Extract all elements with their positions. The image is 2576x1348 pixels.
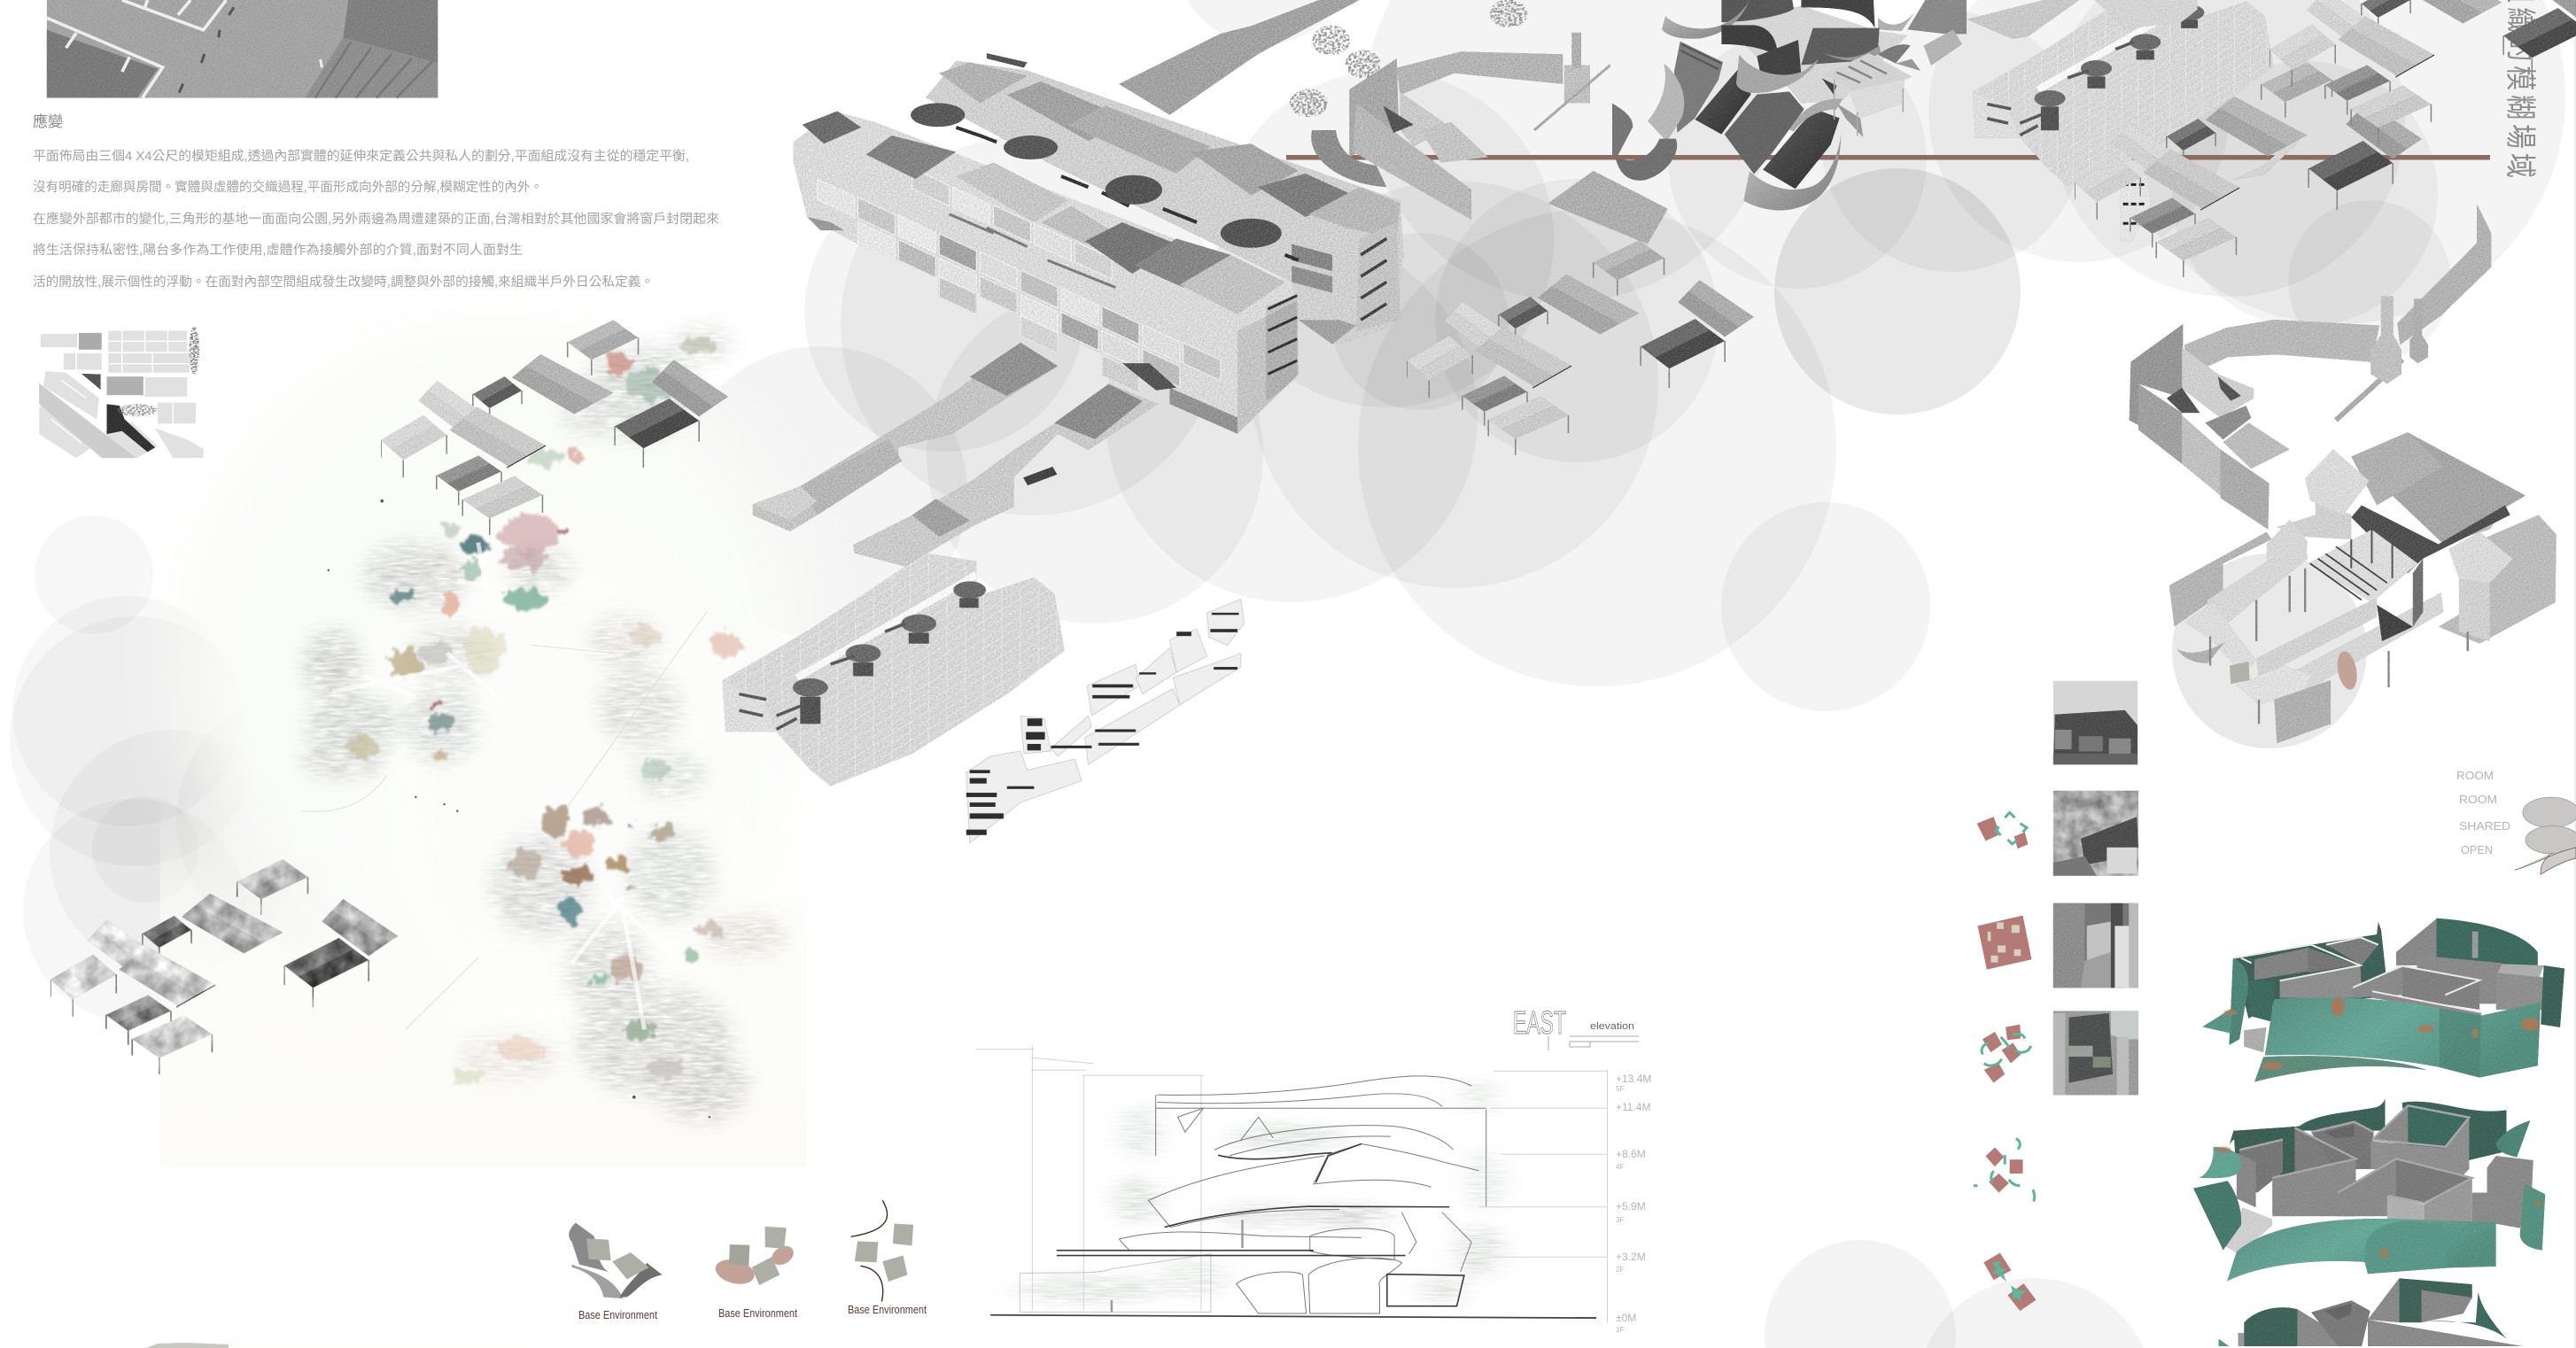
rear housing bar bbox=[911, 53, 1403, 345]
base environment labels bbox=[578, 1304, 927, 1321]
room labels: SHARED bbox=[2459, 820, 2510, 833]
translucent overlapping circles: upper field bbox=[675, 0, 2565, 1348]
diagram: arrows and squares bbox=[1983, 1253, 2036, 1311]
photo: old building bbox=[2053, 681, 2138, 764]
section strip bbox=[966, 599, 1245, 843]
body text: 平面佈局由三個4 X4公尺的模矩組成,透過內部實體的延伸來定義公共與私人的劃分,平面組成沒有主從的穩定平衡, bbox=[33, 148, 689, 164]
elevation level labels: +5.9M bbox=[1616, 1200, 1646, 1212]
guide lines bbox=[976, 1046, 1607, 1322]
body text: 沒有明確的走廊與房間。實體與虛體的交織過程,平面形成向外部的分解,模糊定性的內外。 bbox=[33, 179, 543, 195]
temple bbox=[2169, 432, 2557, 743]
base environment diagrams bbox=[569, 1200, 913, 1302]
elevation level labels: +11.4M bbox=[1616, 1101, 1650, 1113]
body text: 活的開放性,展示個性的浮動。在面對內部空間組成發生改變時,調整與外部的接觸,來組織半戶外日公私定義。 bbox=[33, 275, 654, 290]
body text: 在應變外部都市的變化,三角形的基地一面面向公園,另外兩邊為周遭建築的正面,台灣相對於其他國家會將窗戶封閉起來 bbox=[33, 211, 719, 227]
room labels: ROOM bbox=[2456, 770, 2494, 782]
translucent overlapping circles: left field bbox=[10, 515, 453, 1078]
elevation level labels: 4F bbox=[1616, 1163, 1624, 1171]
brown horizontal datum line bbox=[1286, 155, 2490, 159]
copper-walled models bbox=[2193, 918, 2564, 1346]
fine pencil lines bbox=[301, 612, 707, 1029]
room labels bbox=[2456, 770, 2510, 856]
roof strips and exploded housing block bbox=[722, 0, 1668, 843]
diagram: dispersed bbox=[1977, 812, 2028, 848]
upper right fragments bbox=[1967, 0, 2300, 243]
elevation level labels: 3F bbox=[1616, 1216, 1624, 1224]
east elevation sketch bbox=[976, 1046, 1607, 1322]
house cluster: centre bbox=[1407, 240, 1754, 455]
ink specks bbox=[328, 500, 710, 1118]
base environment labels: Base Environment bbox=[848, 1304, 927, 1316]
rust patches two bbox=[2215, 1147, 2541, 1259]
model three bbox=[2219, 1278, 2523, 1346]
roof strip one bbox=[753, 343, 1058, 531]
diagram: four squares bbox=[1982, 1025, 2031, 1083]
elevation level labels: +8.6M bbox=[1616, 1148, 1646, 1160]
photo: aerial street bbox=[47, 0, 438, 98]
house cluster: upper right A bbox=[2075, 62, 2422, 277]
photo and diagram column bbox=[1974, 681, 2138, 1311]
lower housing block bbox=[722, 553, 1065, 786]
room labels: OPEN bbox=[2461, 844, 2493, 856]
brown ellipse bbox=[2334, 650, 2360, 691]
watercolor site painting bbox=[301, 327, 788, 1121]
building outlines bbox=[1020, 1076, 1486, 1313]
elevation level labels: 1F bbox=[1616, 1326, 1624, 1334]
bottom edge painting fragment bbox=[146, 1327, 531, 1348]
walled fragment and temple axonometric bbox=[2130, 204, 2557, 743]
flat plate upper bbox=[1119, 0, 1360, 115]
elevation level labels: 5F bbox=[1616, 1085, 1624, 1093]
base environment labels: Base Environment bbox=[578, 1309, 657, 1321]
house cluster: lower left, mottled bbox=[50, 859, 398, 1074]
facade blocks bbox=[817, 168, 1221, 393]
photo: alley bbox=[2053, 903, 2138, 988]
diagram three: arcs bbox=[851, 1200, 913, 1302]
body text: 將生活保持私密性,陽台多作為工作使用,虛體作為接觸外部的介質,面對不同人面對生 bbox=[33, 242, 523, 258]
flat plate lower bbox=[1548, 171, 1668, 244]
fence and wall fragment upper bbox=[1311, 33, 1610, 220]
elevation level labels bbox=[1616, 1073, 1651, 1334]
elevation level labels: ±0M bbox=[1616, 1312, 1636, 1324]
small stilt house in the shells bbox=[1825, 53, 1912, 97]
room labels: ROOM bbox=[2459, 794, 2497, 806]
heading: 應變 bbox=[33, 112, 63, 130]
diagram two: ellipses bbox=[710, 1227, 797, 1286]
elevation level labels: +13.4M bbox=[1616, 1073, 1651, 1085]
curving wall group bbox=[2130, 204, 2491, 530]
photo: overgrown hillside bbox=[2053, 791, 2138, 876]
diagram: scattered squares bbox=[1974, 1139, 2035, 1202]
white brush streaks bbox=[332, 542, 676, 1029]
roof strip two bbox=[853, 383, 1158, 567]
grey-green square bbox=[2230, 662, 2250, 684]
watercolor paper wash bbox=[160, 328, 807, 1167]
stacked leaf ellipses bbox=[2515, 797, 2576, 874]
base environment labels: Base Environment bbox=[718, 1307, 797, 1320]
east elevation title block: elevation bbox=[1590, 1021, 1634, 1032]
tree dots bbox=[1290, 0, 1527, 117]
pencil vegetation bbox=[1016, 1079, 1504, 1305]
rust patches one bbox=[2224, 997, 2540, 1069]
east elevation title block bbox=[1513, 1004, 1639, 1050]
body text bbox=[33, 148, 719, 290]
model one bbox=[2202, 918, 2564, 1082]
right edge strip bbox=[2574, 0, 2576, 1348]
model two bbox=[2193, 1096, 2545, 1282]
front housing bar bbox=[794, 112, 1299, 434]
curved shell pile bbox=[1612, 0, 1967, 211]
site plan thumbnail bbox=[39, 326, 204, 458]
house cluster: left, over the painting bbox=[381, 320, 728, 535]
figures bbox=[1112, 1220, 1242, 1312]
right housing block bbox=[1972, 0, 2274, 185]
east elevation title block: EAST bbox=[1513, 1004, 1566, 1041]
wood-grained sheet behind the shells bbox=[1721, 6, 1907, 104]
elevation level labels: 2F bbox=[1616, 1266, 1624, 1274]
diagram: plan square bbox=[1978, 916, 2031, 970]
elevation level labels: +3.2M bbox=[1616, 1251, 1646, 1263]
photo: apartment facade bbox=[2053, 1011, 2138, 1095]
house cluster: upper right B bbox=[2270, 0, 2576, 144]
diagram one: curved sheets bbox=[569, 1223, 663, 1298]
heavy ink lines bbox=[1057, 1144, 1464, 1306]
